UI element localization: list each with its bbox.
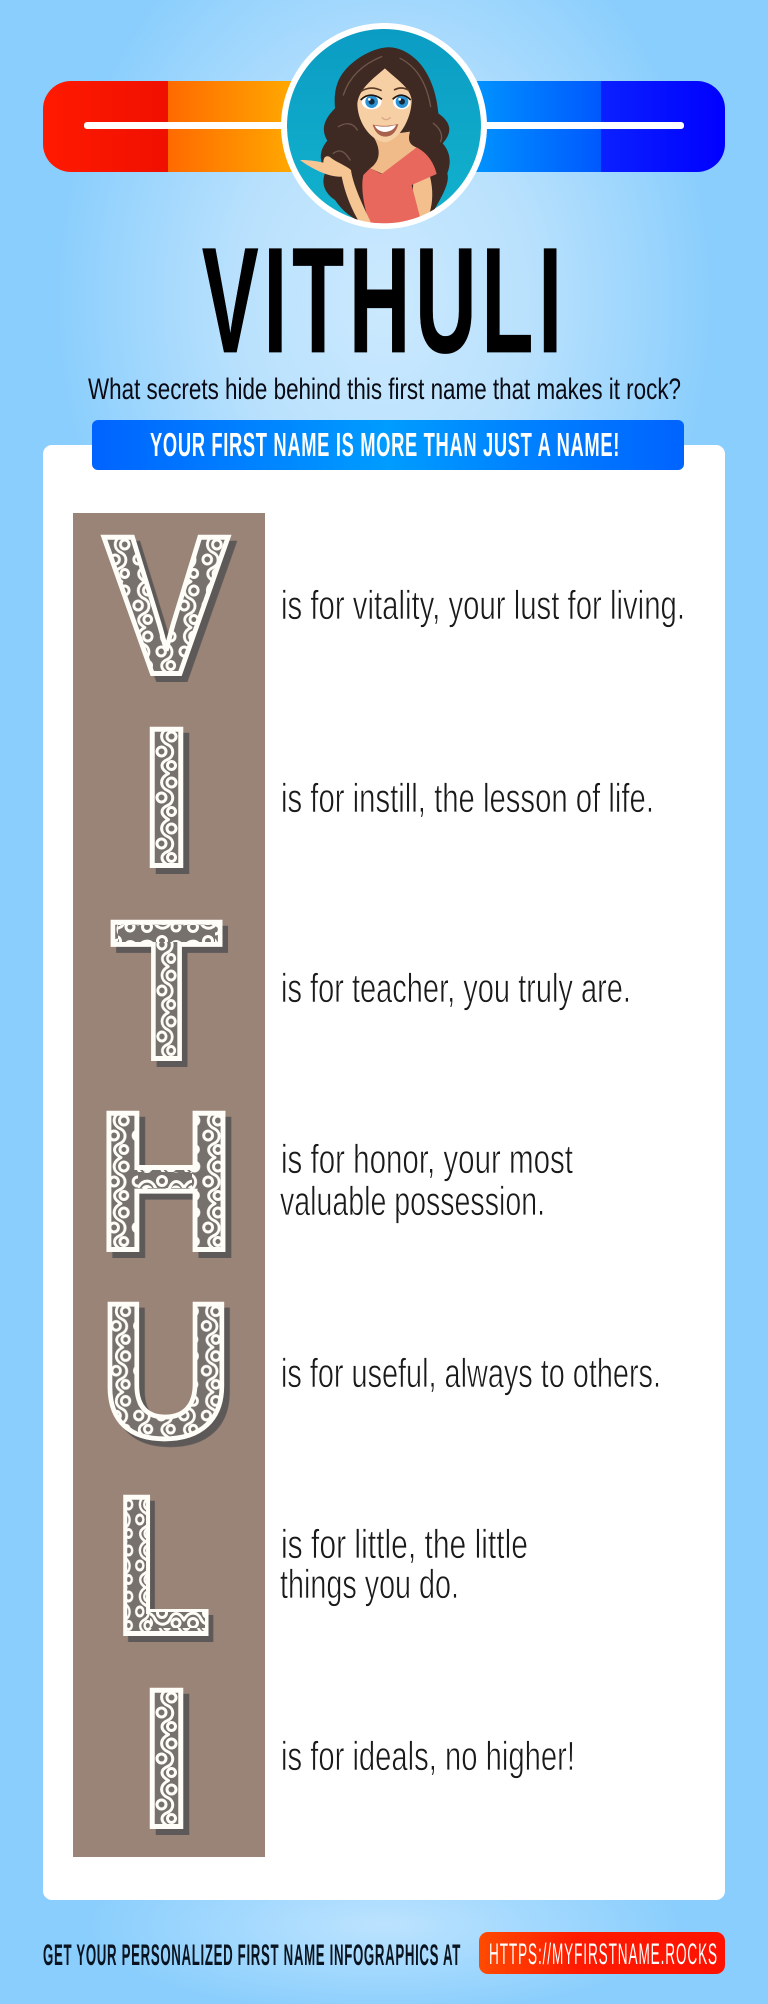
- left eye: [361, 94, 382, 109]
- letter L: L: [115, 1455, 211, 1675]
- hair highlights: [333, 57, 442, 160]
- banner: [92, 420, 684, 470]
- light blue segment: [470, 81, 601, 172]
- line: I meaning: is for ideals, no higher!: [281, 1733, 575, 1779]
- letter I: I: [139, 1648, 194, 1868]
- line: L meaning: is for little, the little: [281, 1521, 528, 1567]
- footer url button: [479, 1932, 725, 1974]
- line: T meaning: is for teacher, you truly are.: [281, 965, 631, 1011]
- line: L meaning: [280, 1521, 528, 1607]
- portrait badge: [281, 23, 487, 229]
- eyebrows: [361, 88, 382, 92]
- badge ring: [281, 23, 487, 229]
- right eye: [393, 94, 411, 109]
- button background: [479, 1932, 725, 1974]
- badge background: [287, 29, 481, 223]
- line: H meaning: valuable possession.: [280, 1178, 545, 1224]
- icon: cartoon woman: [300, 47, 450, 223]
- letter T: T: [111, 881, 222, 1101]
- letter I: I: [139, 686, 194, 908]
- right arm: [412, 177, 432, 223]
- orange segment: [168, 81, 298, 172]
- line: H meaning: is for honor, your most: [281, 1136, 573, 1182]
- hair: [321, 47, 450, 220]
- neck and chest: [370, 132, 418, 175]
- nose: [382, 117, 391, 120]
- red segment: [43, 81, 168, 172]
- line: L meaning: things you do.: [280, 1561, 459, 1607]
- banner background: [92, 420, 684, 470]
- panel: letter column: [73, 495, 265, 1868]
- white line: [84, 122, 684, 129]
- dark blue segment: [601, 81, 725, 172]
- left arm and hand: [300, 156, 371, 223]
- mouth: [373, 124, 398, 137]
- header ribbon bar: [43, 81, 725, 172]
- letter V: V: [103, 495, 229, 716]
- letter U: U: [99, 1263, 233, 1479]
- line: H meaning: [280, 1136, 573, 1224]
- shirt: [362, 147, 437, 223]
- letter column background: [73, 513, 265, 1857]
- letter H: H: [96, 1071, 236, 1292]
- panel: white content: [43, 445, 725, 1900]
- face: [357, 68, 412, 142]
